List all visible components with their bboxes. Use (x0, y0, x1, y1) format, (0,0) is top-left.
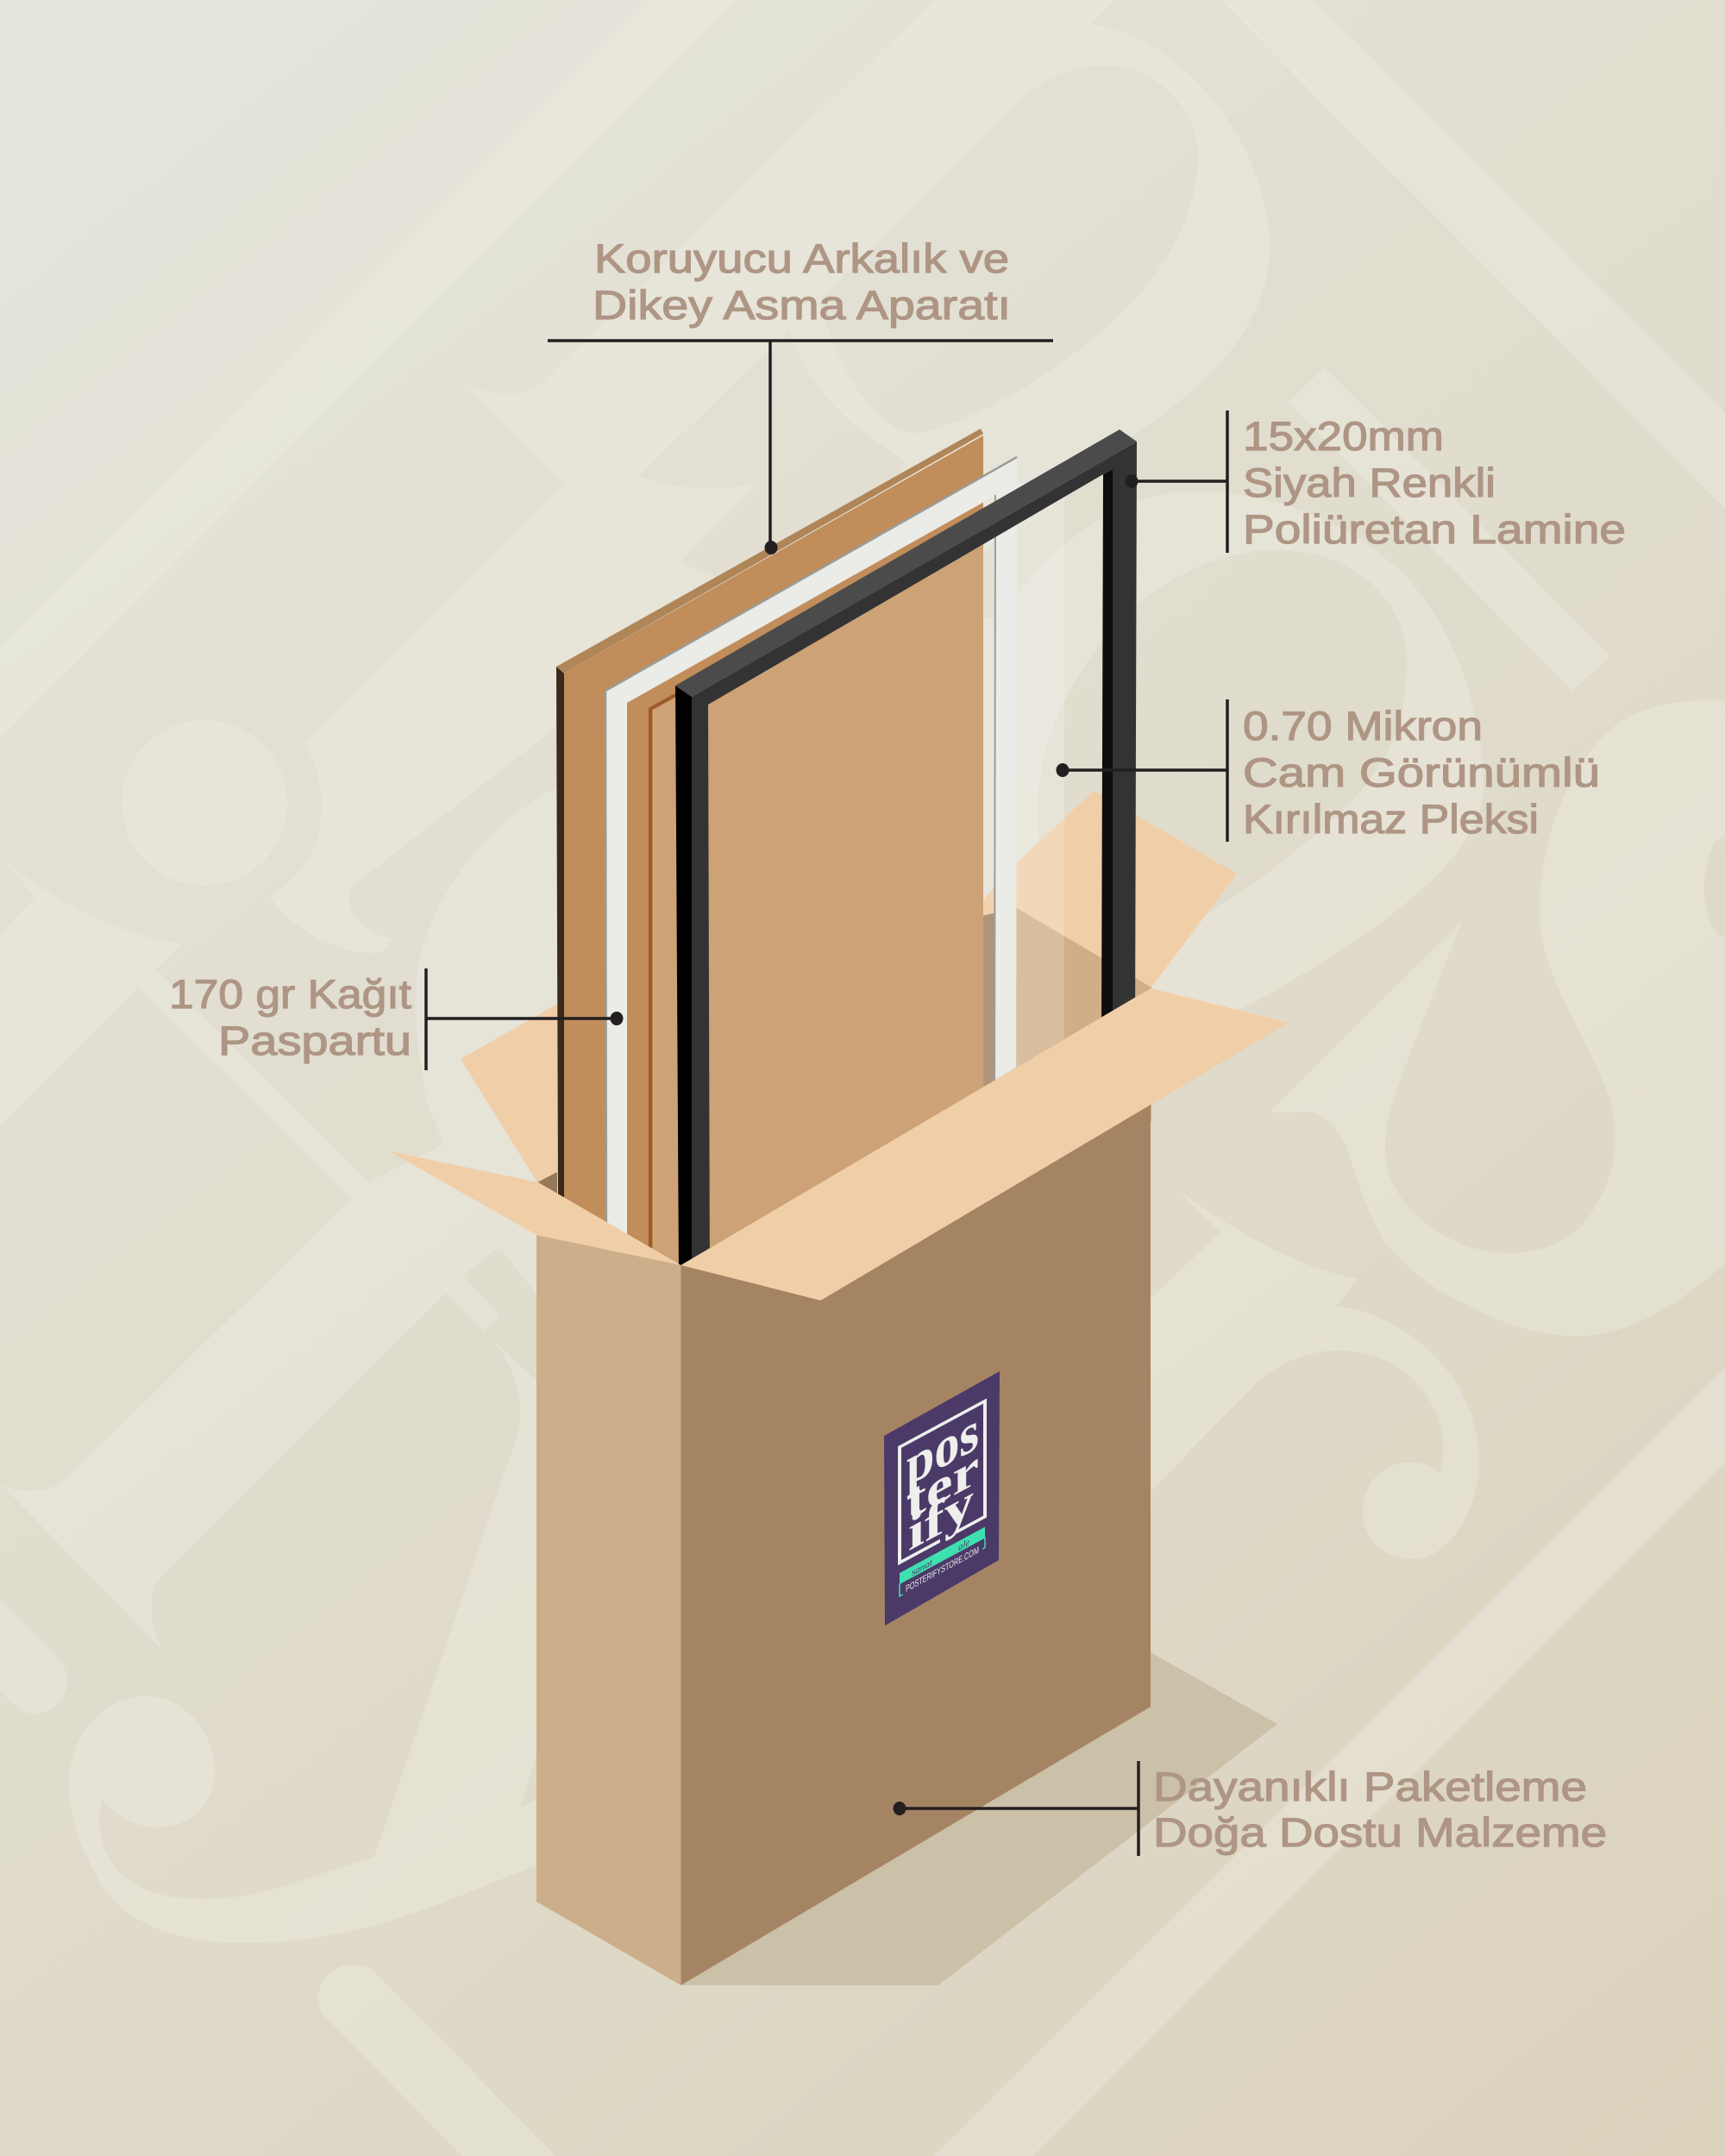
logo sticker (884, 1371, 1000, 1626)
callout: paper mat: Paspartu (218, 1018, 411, 1063)
callout: packaging: Dayanıklı Paketleme (1153, 1764, 1587, 1809)
box right face (681, 988, 1151, 1985)
callout: backing and hanger: Dikey Asma Aparatı (593, 282, 1011, 328)
callout: frame material: Siyah Renkli (1243, 460, 1496, 505)
black polyurethane frame (675, 429, 1137, 1294)
box front right flap (681, 988, 1289, 1300)
box front left flap (390, 1151, 681, 1265)
callout: plexi: Kırılmaz Pleksi (1243, 796, 1539, 842)
poster edge line (650, 695, 675, 1294)
cardboard box and frame assembly (390, 429, 1289, 1985)
callout: packaging (894, 1761, 1607, 1856)
callout: backing and hanger (548, 235, 1053, 555)
logo sticker: ale (958, 1537, 969, 1553)
callout: frame material (1125, 411, 1626, 553)
inner back flap, right (966, 791, 1237, 988)
callout: plexi: Cam Görünümlü (1243, 749, 1600, 795)
callout: paper mat (169, 968, 623, 1070)
callout: packaging: Doğa Dostu Malzeme (1153, 1809, 1607, 1855)
logo sticker: POSTERIFYSTORE.COM (906, 1545, 979, 1595)
inner back flap, left (461, 1004, 557, 1182)
box left face (536, 1235, 681, 1985)
logo sticker: sanat (912, 1557, 933, 1578)
logo sticker: pos (906, 1397, 979, 1500)
white paper mat (605, 457, 1017, 1294)
box ground shadow (681, 1652, 1277, 1985)
logo sticker: ter (906, 1438, 979, 1532)
callout: frame material: Poliüretan Lamine (1243, 506, 1626, 552)
callout: plexi: 0.70 Mikron (1243, 703, 1483, 749)
callout: backing and hanger: Koruyucu Arkalık ve (594, 235, 1009, 281)
inner box corner (537, 1172, 557, 1196)
callout: paper mat: 170 gr Kağıt (169, 971, 411, 1017)
callout: plexi (1056, 699, 1600, 842)
backing board (556, 429, 983, 1294)
logo sticker: ify (908, 1472, 974, 1563)
poster layer (653, 526, 983, 1294)
callout: frame material: 15x20mm (1243, 413, 1444, 459)
glass-look plexi sheet (983, 483, 1064, 1087)
inner box wall (983, 908, 1151, 1121)
